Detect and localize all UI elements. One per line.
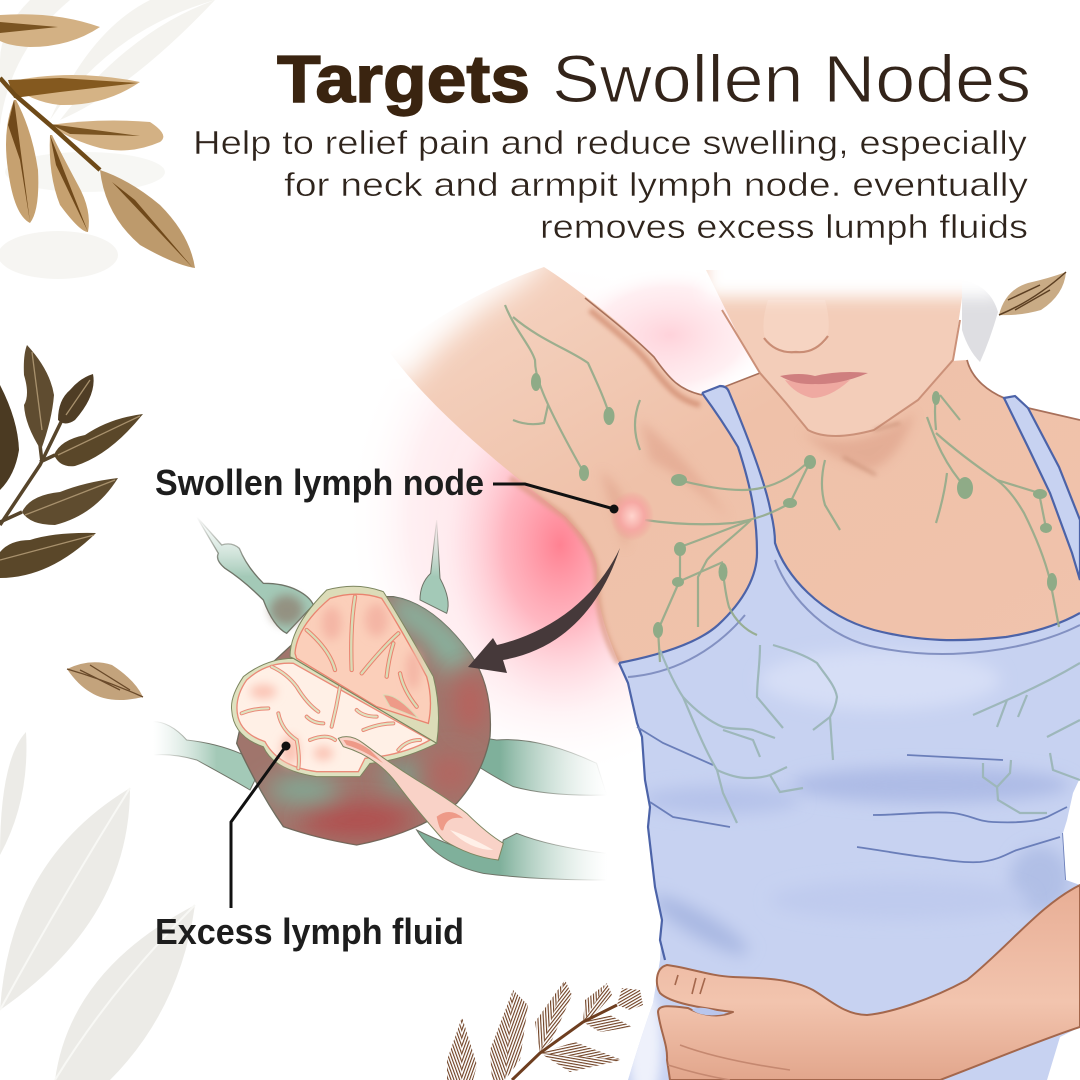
right strap	[1004, 396, 1080, 580]
upper lobe blush	[322, 603, 421, 690]
lower lobe folds	[242, 667, 420, 768]
efferent duct	[338, 737, 503, 860]
forearm and hand	[657, 885, 1080, 1080]
label: excess lymph fluid	[155, 742, 464, 952]
upper lobes fill	[295, 594, 430, 723]
upper cut section	[290, 586, 439, 743]
vessel bottom	[417, 830, 607, 880]
white fade over arm end	[340, 240, 560, 385]
label: swollen lymph node: Swollen lymph node	[155, 462, 484, 503]
golden branch top left	[0, 14, 195, 268]
body colouring	[267, 590, 485, 837]
label: excess lymph fluid: Excess lymph fluid	[155, 911, 464, 952]
pine sprig bottom	[447, 980, 643, 1080]
collarbone lines	[843, 423, 900, 475]
folds	[637, 727, 1067, 880]
lymph vessels on top	[660, 645, 1080, 823]
arm and chest skin	[390, 267, 1080, 663]
nose	[763, 300, 829, 352]
floating leaf left	[67, 662, 143, 700]
node body	[237, 597, 490, 845]
duct pale tip	[450, 830, 493, 850]
lips	[780, 372, 868, 398]
lymph vessels on skin	[505, 305, 1059, 662]
neckband line	[628, 560, 1080, 677]
title: Swollen Nodes	[552, 42, 1031, 117]
description text: removes excess lumph fluids	[540, 208, 1028, 245]
white fade over forehead	[706, 235, 998, 297]
vessel top	[420, 520, 448, 613]
lymph nodes	[531, 373, 1057, 638]
decorative pale leaves top left	[0, 0, 215, 279]
pink inflammation glow	[345, 260, 775, 780]
jawline	[722, 310, 960, 436]
tank top	[619, 386, 1080, 1080]
woman illustration	[340, 235, 1080, 1080]
description text: Help to relief pain and reduce swelling, especially	[193, 124, 1028, 161]
description text: for neck and armpit lymph node. eventually	[284, 166, 1029, 203]
lower cut section	[231, 658, 437, 777]
label: swollen lymph node	[155, 462, 618, 514]
seam	[293, 658, 437, 743]
vessel right	[443, 727, 607, 795]
description text	[193, 124, 1029, 245]
decorative pale leaves bottom left	[0, 732, 195, 1080]
lower lobe blush	[250, 684, 333, 765]
hair	[962, 280, 998, 362]
title: Targets	[277, 42, 530, 117]
floating leaf top right	[999, 272, 1066, 315]
arm edge shading	[510, 478, 619, 663]
face	[706, 270, 966, 436]
neck shadow	[800, 412, 915, 470]
dark leaf branch left	[0, 345, 143, 578]
swollen bump	[610, 491, 654, 541]
upper lobe folds	[307, 597, 417, 707]
lower lobes fill	[237, 663, 430, 772]
side background	[1047, 778, 1080, 1080]
tank outlines	[619, 386, 1080, 960]
tank shading	[629, 650, 1070, 1080]
duct inner detail	[343, 740, 463, 831]
vessel left	[153, 722, 263, 790]
lymph node cross-section diagram	[153, 517, 607, 880]
title	[277, 42, 1031, 117]
curved arrow to node diagram	[468, 548, 620, 673]
vessel top left	[197, 517, 313, 633]
inner sinus	[383, 695, 418, 718]
armpit crease shading	[600, 420, 730, 550]
